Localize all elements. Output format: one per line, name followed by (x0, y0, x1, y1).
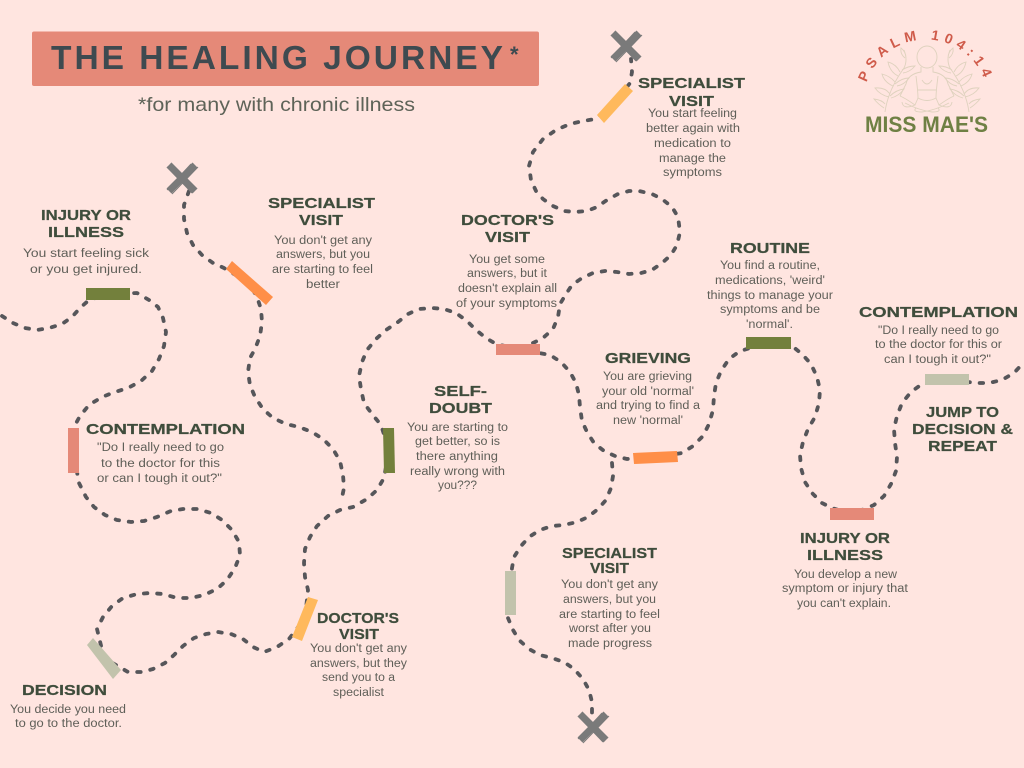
icon: X end mark top (611, 31, 642, 62)
label: doctor's visit, bottom: send you to a (322, 672, 396, 684)
label: specialist visit, bottom: are starting to feel (559, 609, 660, 621)
icon: X end mark left (167, 163, 198, 194)
label: specialist visit, bottom: made progress (568, 638, 652, 650)
label: contemplation, left: or can I tough it out?" (97, 473, 222, 485)
label: injury or illness, right: You develop a new (794, 569, 898, 581)
label: self-doubt: really wrong with (410, 466, 505, 478)
label: specialist visit, left: You don't get any (274, 235, 372, 247)
marker: contemplation 2 (925, 374, 969, 385)
label: doctor's visit, bottom: VISIT (339, 626, 379, 643)
title banner: * (510, 42, 519, 67)
label: doctor's visit, centre (456, 212, 557, 310)
label: jump to decision and repeat: REPEAT (928, 438, 997, 455)
label: grieving: your old 'normal' (602, 386, 694, 398)
label: injury or illness, right: symptom or injury that (782, 583, 909, 595)
label: contemplation, right (859, 304, 1018, 366)
label: specialist visit, top: You start feeling (648, 108, 737, 120)
title banner (32, 32, 539, 86)
label: injury or illness: ILLNESS (48, 224, 124, 241)
label: specialist visit, top: VISIT (669, 93, 714, 110)
dashed journey path: main route (2, 293, 1024, 672)
label: doctor's visit, bottom: DOCTOR'S (317, 610, 399, 627)
label: injury or illness, right: ILLNESS (807, 547, 883, 564)
label: routine: You find a routine, (720, 260, 820, 272)
label: self-doubt: DOUBT (429, 400, 492, 417)
label: grieving (596, 350, 701, 427)
logo: Miss Mae's: PSALM 104:14 (858, 30, 992, 82)
marker: upper specialist visit (597, 84, 633, 123)
label: contemplation, right: CONTEMPLATION (859, 304, 1018, 321)
marker: lower specialist visit (505, 571, 516, 615)
marker: decision (87, 638, 121, 679)
label: injury or illness, right (782, 530, 909, 610)
label: contemplation, left: to the doctor for this (101, 458, 220, 470)
label: decision: DECISION (22, 682, 107, 699)
label: specialist visit, top: better again with (646, 123, 740, 135)
marker: self-doubt (383, 428, 395, 473)
label: contemplation, left (86, 421, 245, 485)
label: self-doubt: get better, so is (415, 436, 500, 448)
label: specialist visit, top (638, 75, 745, 179)
label: routine: symptoms and be (720, 304, 820, 316)
label: decision (10, 682, 126, 730)
icon: X end mark bottom (578, 712, 609, 743)
label: specialist visit, bottom: You don't get any (561, 579, 658, 591)
label: contemplation, right: can I tough it out?" (884, 354, 991, 366)
label: decision: to go to the doctor. (15, 718, 122, 730)
dashed path: upper specialist branch (529, 59, 680, 343)
label: doctor's visit, centre: doesn't explain all (458, 283, 557, 295)
label: specialist visit, bottom (559, 545, 660, 650)
label: injury or illness (23, 207, 149, 276)
label: grieving: and trying to find a (596, 400, 701, 412)
marker: doctor's visit 2 (496, 344, 540, 355)
logo: Miss Mae's: MISS MAE'S (865, 112, 988, 137)
dashed path: lower specialist branch (508, 463, 613, 715)
label: contemplation, left: CONTEMPLATION (86, 421, 245, 438)
label: doctor's visit, bottom: You don't get any (310, 643, 407, 655)
label: doctor's visit, bottom: specialist (333, 687, 385, 699)
label: doctor's visit, centre: answers, but it (467, 268, 548, 280)
label: doctor's visit, centre: VISIT (485, 229, 530, 246)
label: doctor's visit, centre: of your symptoms (456, 298, 557, 310)
label: injury or illness: You start feeling sick (23, 248, 149, 260)
label: grieving: new 'normal' (613, 415, 683, 427)
label: contemplation, right: to the doctor for this or (875, 339, 1002, 351)
label: specialist visit, bottom: answers, but you (563, 594, 656, 606)
label: specialist visit, left: SPECIALIST (268, 195, 375, 212)
label: specialist visit, left: are starting to feel (272, 264, 373, 276)
label: self-doubt (407, 383, 508, 492)
label: jump to decision and repeat: JUMP TO (926, 404, 999, 421)
label: injury or illness, right: INJURY OR (800, 530, 890, 547)
label: decision: You decide you need (10, 704, 126, 716)
label: routine: 'normal'. (746, 319, 793, 331)
label: specialist visit, top: symptoms (663, 167, 722, 179)
label: self-doubt: there anything (416, 451, 498, 463)
marker: routine (746, 337, 791, 349)
title banner: THE HEALING JOURNEY (51, 40, 503, 77)
label: doctor's visit, bottom (310, 610, 407, 699)
label: self-doubt: You are starting to (407, 422, 508, 434)
label: specialist visit, top: SPECIALIST (638, 75, 745, 92)
label: self-doubt: SELF- (434, 383, 487, 400)
label: injury or illness, right: you can't explain. (797, 598, 891, 610)
label: self-doubt: you??? (438, 480, 477, 492)
label: jump to decision and repeat (912, 404, 1013, 455)
label: injury or illness: or you get injured. (30, 264, 142, 276)
label: doctor's visit, centre: DOCTOR'S (461, 212, 554, 229)
label: specialist visit, bottom: worst after you (568, 623, 651, 635)
label: specialist visit, left: better (306, 279, 340, 291)
label: contemplation, left: "Do I really need to go (97, 442, 224, 454)
label: contemplation, right: "Do I really need to go (878, 325, 999, 337)
label: specialist visit, top: manage the (659, 153, 726, 165)
label: specialist visit, left (268, 195, 375, 291)
subtitle: *for many with chronic illness (138, 94, 415, 116)
dashed path: first specialist branch (184, 191, 344, 502)
label: routine: ROUTINE (730, 240, 810, 257)
label: routine (707, 240, 833, 331)
marker: injury or illness 2 (830, 508, 874, 520)
label: specialist visit, left: VISIT (299, 212, 343, 229)
label: jump to decision and repeat: DECISION & (912, 421, 1013, 438)
label: routine: medications, 'weird' (715, 275, 825, 287)
marker: first specialist visit (226, 261, 273, 305)
marker: injury or illness (86, 288, 130, 300)
marker: contemplation (68, 428, 79, 473)
marker: grieving (633, 451, 678, 464)
label: doctor's visit, centre: You get some (469, 254, 545, 266)
logo: Miss Mae's (858, 30, 992, 137)
label: grieving: You are grieving (603, 371, 692, 383)
label: specialist visit, bottom: VISIT (590, 560, 629, 577)
label: specialist visit, left: answers, but you (276, 249, 370, 261)
marker: doctor's visit (292, 597, 318, 641)
label: routine: things to manage your (707, 290, 833, 302)
label: doctor's visit, bottom: answers, but they (310, 658, 407, 670)
label: grieving: GRIEVING (605, 350, 691, 367)
label: injury or illness: INJURY OR (41, 207, 131, 224)
label: specialist visit, bottom: SPECIALIST (562, 545, 657, 562)
label: specialist visit, top: medication to (654, 138, 731, 150)
